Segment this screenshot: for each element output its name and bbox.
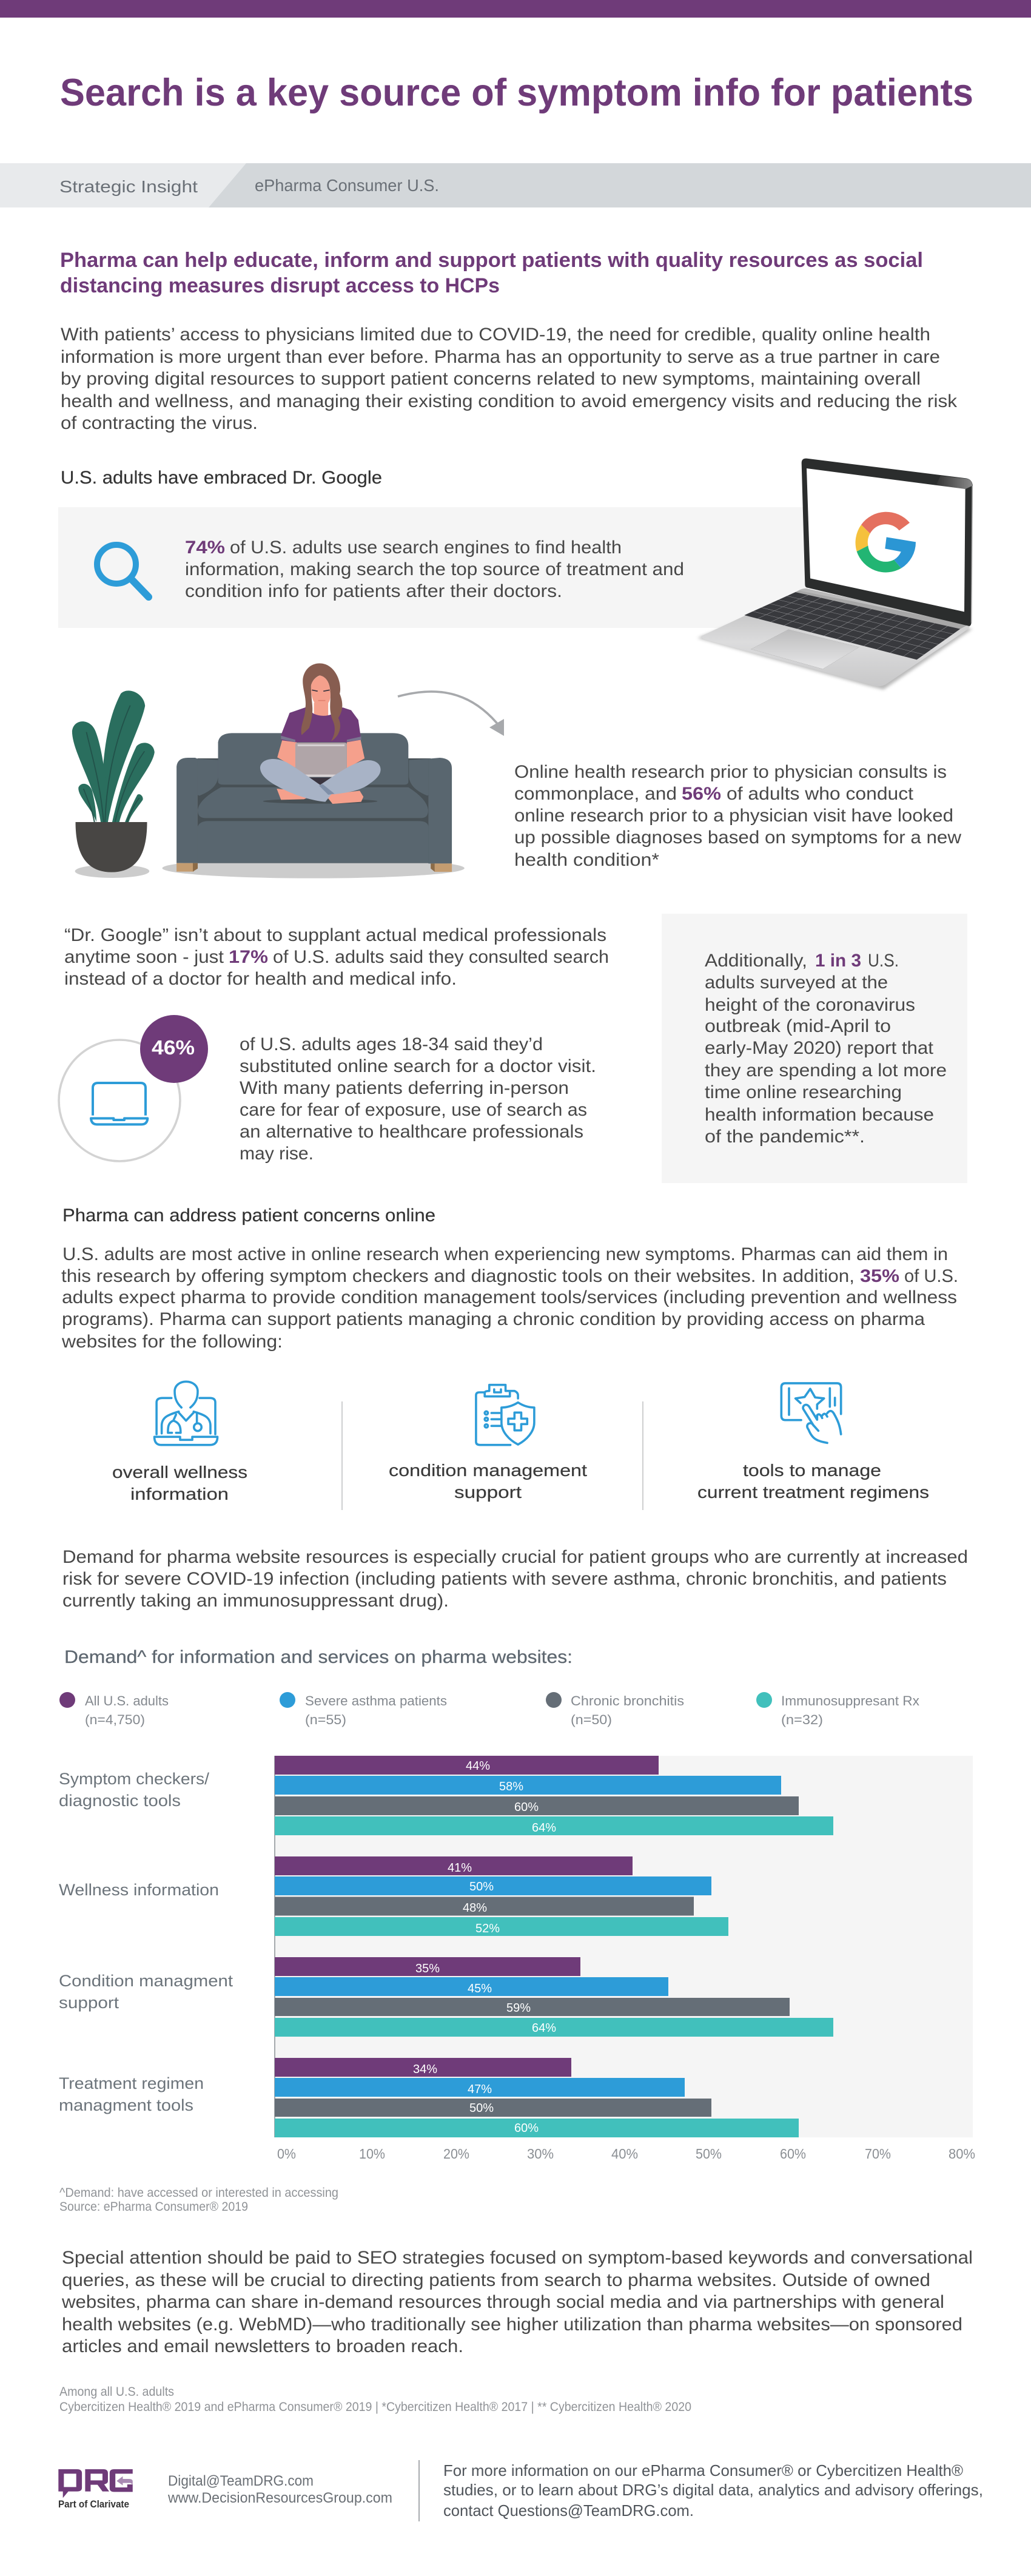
category strip [0, 163, 1031, 207]
x axis labels [277, 2146, 975, 2162]
icon: laptop in circle with 46% badge [59, 1015, 208, 1161]
group: condition management [59, 1957, 833, 2037]
group: wellness information: 52% [475, 1922, 500, 1935]
arrow: from woman to text [398, 692, 504, 736]
text: 46% explanation: an alternative to healthcare professionals [240, 1122, 583, 1142]
badge: 46% [140, 1015, 208, 1083]
panel: 1 in 3 callout: adults surveyed at the [705, 973, 888, 993]
resource item: treatment tools [697, 1383, 929, 1502]
footer call to action: contact Questions@TeamDRG.com. [443, 2501, 694, 2520]
heading: Dr. Google: U.S. adults have embraced Dr. Google [61, 468, 382, 488]
legend: all adults [59, 1692, 169, 1727]
subheading [60, 249, 923, 297]
panel: 1 in 3 callout: health information because [705, 1105, 934, 1125]
intro paragraph [61, 325, 958, 433]
x axis labels: 70% [865, 2146, 891, 2162]
text: 46% explanation: With many patients deferring in-person [240, 1078, 569, 1098]
sofa [176, 733, 452, 872]
panel: 1 in 3 callout: outbreak (mid-April to [705, 1016, 891, 1036]
bar chart [59, 1756, 975, 2162]
woman with tablet [260, 663, 381, 804]
legend: bronchitis: Chronic bronchitis [571, 1693, 684, 1708]
text: 46% explanation: substituted online search for a doctor visit. [240, 1056, 596, 1076]
legend: immunosuppressant [756, 1692, 919, 1727]
paragraph: SEO recommendations [61, 2248, 973, 2356]
group: treatment regimen: 50% [469, 2102, 494, 2115]
paragraph: SEO recommendations: Special attention should be paid to SEO strategies focused on symptom-based keywords and conversational [62, 2248, 973, 2268]
paragraph: pharma concerns: of U.S. [904, 1266, 958, 1286]
panel: 1 in 3 callout: U.S. [868, 951, 899, 971]
group: treatment regimen: 34% [413, 2063, 437, 2076]
chart legend [59, 1692, 919, 1727]
text: 46% explanation [240, 1034, 596, 1164]
paragraph: pharma concerns [61, 1244, 958, 1352]
text: online health research [514, 762, 961, 870]
panel: 1 in 3 callout: Additionally, [705, 951, 807, 971]
icon: hand touching star on screen [781, 1383, 841, 1443]
group: wellness information: 48% [463, 1901, 487, 1915]
intro paragraph: by proving digital resources to support patient concerns related to new symptoms, maintaining overall [61, 369, 921, 389]
panel: 1 in 3 callout: of the pandemic**. [705, 1127, 865, 1147]
resource item: condition management: support [454, 1483, 522, 1502]
paragraph: SEO recommendations: health websites (e.g. WebMD)—who traditionally see higher utilization than pharma websites—on sponsored [62, 2315, 962, 2335]
panel: 1 in 3 callout: time online researching [705, 1082, 902, 1102]
top purple bar [0, 0, 1031, 18]
panel: 74% search stat [58, 507, 808, 628]
group: treatment regimen: Treatment regimen [59, 2074, 204, 2092]
group: condition management: 64% [532, 2021, 556, 2035]
text: Dr. Google 17%: anytime soon - just [64, 947, 224, 967]
legend: immunosuppressant: (n=32) [781, 1712, 823, 1727]
laptop glyph [91, 1083, 147, 1124]
resource item: condition management [389, 1385, 587, 1502]
group: treatment regimen [59, 2058, 799, 2137]
group: wellness information: 50% [469, 1880, 494, 1893]
subheading: distancing measures disrupt access to HCPs [60, 274, 500, 297]
panel: 1 in 3 callout: 1 in 3 [815, 951, 861, 971]
paragraph: SEO recommendations: queries, as these will be crucial to directing patients from search to pharma websites. Outside of owned [62, 2270, 930, 2290]
group: symptom checkers: 44% [466, 1759, 490, 1773]
resource item: treatment tools: tools to manage [743, 1461, 881, 1480]
contact links: Digital@TeamDRG.com [168, 2473, 314, 2489]
legend: all adults: (n=4,750) [85, 1712, 145, 1727]
x axis labels: 50% [696, 2146, 722, 2162]
resource item: treatment tools: current treatment regimens [697, 1483, 929, 1502]
x axis labels: 20% [443, 2146, 469, 2162]
logo: DRG part of Clarivate [58, 2469, 133, 2510]
legend: asthma [280, 1692, 447, 1727]
paragraph: patient group demand: Demand for pharma website resources is especially crucial for patient groups who are currently at increased [62, 1547, 968, 1567]
x axis labels: 80% [949, 2146, 975, 2162]
paragraph: patient group demand: risk for severe COVID-19 infection (including patients with severe asthma, chronic bronchitis, and patients [62, 1569, 947, 1589]
badge: 46%: 46% [152, 1036, 195, 1059]
intro paragraph: of contracting the virus. [61, 413, 258, 433]
group: treatment regimen: 60% [514, 2122, 539, 2135]
contact links: www.DecisionResourcesGroup.com [167, 2490, 392, 2506]
group: symptom checkers: 58% [499, 1780, 523, 1793]
paragraph: pharma concerns: this research by offering symptom checkers and diagnostic tools on their websites. In addition, [61, 1266, 855, 1286]
text: online health research: Online health research prior to physician consults is [514, 762, 947, 782]
chart heading: Demand^ for information and services on pharma websites: [64, 1647, 573, 1667]
legend: bronchitis: (n=50) [571, 1712, 612, 1727]
resource item: overall wellness: information [130, 1485, 229, 1503]
contact links [167, 2473, 392, 2506]
x axis labels: 60% [780, 2146, 806, 2162]
footer call to action: For more information on our ePharma Consumer® or Cybercitizen Health® [443, 2461, 963, 2480]
stat text: condition info for patients after their doctors. [185, 581, 562, 601]
intro paragraph: health and wellness, and managing their existing condition to avoid emergency visits and reducing the risk [61, 391, 958, 411]
intro paragraph: information is more urgent than ever before. Pharma has an opportunity to serve as a true partner in care [61, 347, 940, 367]
text: online health research: 56% [682, 784, 721, 804]
x axis labels: 30% [527, 2146, 554, 2162]
plant [72, 690, 155, 872]
text: online health research: commonplace, and [514, 784, 677, 804]
icon: clipboard with shield [476, 1385, 534, 1445]
stat text: 74% [185, 538, 225, 558]
icon: doctor on laptop [155, 1381, 218, 1445]
icon: magnifying glass [97, 545, 149, 597]
chart footnote: ^Demand: have accessed or interested in accessing [59, 2186, 338, 2200]
panel: 1 in 3 callout: height of the coronavirus [705, 995, 915, 1015]
paragraph: pharma concerns: U.S. adults are most active in online research when experiencing new symptoms. Pharmas can aid them in [62, 1244, 948, 1264]
legend: all adults: All U.S. adults [85, 1693, 169, 1708]
source note: Cybercitizen Health® 2019 and ePharma Consumer® 2019 | *Cybercitizen Health® 2017 | ** Cybercitizen Health® 2020 [59, 2400, 691, 2414]
text: Dr. Google 17%: instead of a doctor for health and medical info. [64, 969, 457, 989]
text: 46% explanation: care for fear of exposure, use of search as [240, 1100, 587, 1120]
group: condition management: 35% [415, 1962, 440, 1975]
panel: 1 in 3 callout: they are spending a lot more [705, 1060, 947, 1081]
text: online health research: health condition* [514, 850, 659, 870]
footer call to action: studies, or to learn about DRG’s digital data, analytics and advisory offerings, [443, 2481, 983, 2499]
paragraph: SEO recommendations: websites, pharma can share in-demand resources through social media and via partnerships with general [61, 2292, 944, 2312]
illustration: laptop with Google logo [697, 459, 973, 690]
panel: 1 in 3 callout [662, 914, 967, 1183]
chart footnote: Source: ePharma Consumer® 2019 [59, 2200, 248, 2214]
paragraph: SEO recommendations: articles and email newsletters to broaden reach. [62, 2336, 463, 2356]
footer call to action [443, 2461, 983, 2520]
group: symptom checkers: Symptom checkers/ [59, 1770, 210, 1788]
paragraph: patient group demand: currently taking an immunosuppressant drug). [62, 1591, 449, 1611]
x axis labels: 10% [359, 2146, 385, 2162]
paragraph: patient group demand [62, 1547, 968, 1611]
group: condition management: 59% [506, 2001, 531, 2015]
text: Dr. Google 17%: of U.S. adults said they consulted search [273, 947, 609, 967]
group: treatment regimen: managment tools [59, 2096, 193, 2114]
paragraph: pharma concerns: programs). Pharma can support patients managing a chronic condition by providing access on pharma [62, 1309, 925, 1329]
paragraph: pharma concerns: 35% [860, 1266, 899, 1286]
Google G [856, 512, 916, 572]
group: wellness information [59, 1856, 728, 1936]
text: online health research: online research prior to a physician visit have looked [514, 806, 953, 826]
chart footnote [59, 2186, 338, 2214]
text: 46% explanation: may rise. [240, 1144, 314, 1164]
text: online health research: of adults who conduct [727, 784, 914, 804]
group: symptom checkers: diagnostic tools [59, 1792, 181, 1810]
stat text: of U.S. adults use search engines to find health [230, 538, 622, 558]
legend: immunosuppressant: Immunosuppresant Rx [781, 1693, 919, 1708]
stat text [185, 538, 684, 601]
group: symptom checkers: 64% [532, 1821, 556, 1835]
title: Search is a key source of symptom info for patients [60, 72, 973, 114]
text: online health research: up possible diagnoses based on symptoms for a new [514, 828, 961, 848]
paragraph: pharma concerns: adults expect pharma to provide condition management tools/services (including prevention and wellness [62, 1287, 957, 1307]
source note: Among all U.S. adults [59, 2385, 174, 2399]
stat text: information, making search the top source of treatment and [185, 559, 684, 579]
x axis labels: 0% [277, 2146, 296, 2162]
group: condition management: Condition managment [59, 1972, 233, 1990]
group: symptom checkers: 60% [514, 1801, 539, 1814]
group: symptom checkers [59, 1756, 833, 1835]
intro paragraph: With patients’ access to physicians limited due to COVID-19, the need for credible, quality online health [61, 325, 930, 345]
group: wellness information: 41% [448, 1861, 472, 1875]
group: condition management: 45% [468, 1982, 492, 1995]
heading: pharma concerns: Pharma can address patient concerns online [62, 1205, 435, 1226]
source note [59, 2385, 691, 2414]
group: treatment regimen: 47% [468, 2083, 492, 2096]
logo: DRG part of Clarivate: Part of Clarivate [58, 2498, 129, 2510]
legend: asthma: Severe asthma patients [305, 1693, 447, 1708]
strip label: type: Strategic Insight [59, 177, 198, 196]
x axis labels: 40% [611, 2146, 638, 2162]
resource item: overall wellness [112, 1381, 247, 1503]
text: Dr. Google 17% [64, 925, 609, 989]
text: Dr. Google 17%: “Dr. Google” isn’t about to supplant actual medical professionals [64, 925, 606, 945]
strip label: product: ePharma Consumer U.S. [255, 176, 439, 195]
illustration: plant and woman on sofa [72, 663, 465, 878]
subheading: Pharma can help educate, inform and support patients with quality resources as social [60, 249, 923, 272]
paragraph: pharma concerns: websites for the following: [61, 1332, 283, 1352]
text: 46% explanation: of U.S. adults ages 18-34 said they’d [240, 1034, 543, 1054]
legend: asthma: (n=55) [305, 1712, 346, 1727]
text: Dr. Google 17%: 17% [229, 947, 268, 967]
resource item: overall wellness: overall wellness [112, 1463, 247, 1482]
group: condition management: support [59, 1994, 119, 2012]
legend: bronchitis [546, 1692, 684, 1727]
resource item: condition management: condition management [389, 1461, 587, 1480]
group: wellness information: Wellness information [59, 1881, 219, 1899]
panel: 1 in 3 callout: early-May 2020) report that [705, 1038, 934, 1058]
